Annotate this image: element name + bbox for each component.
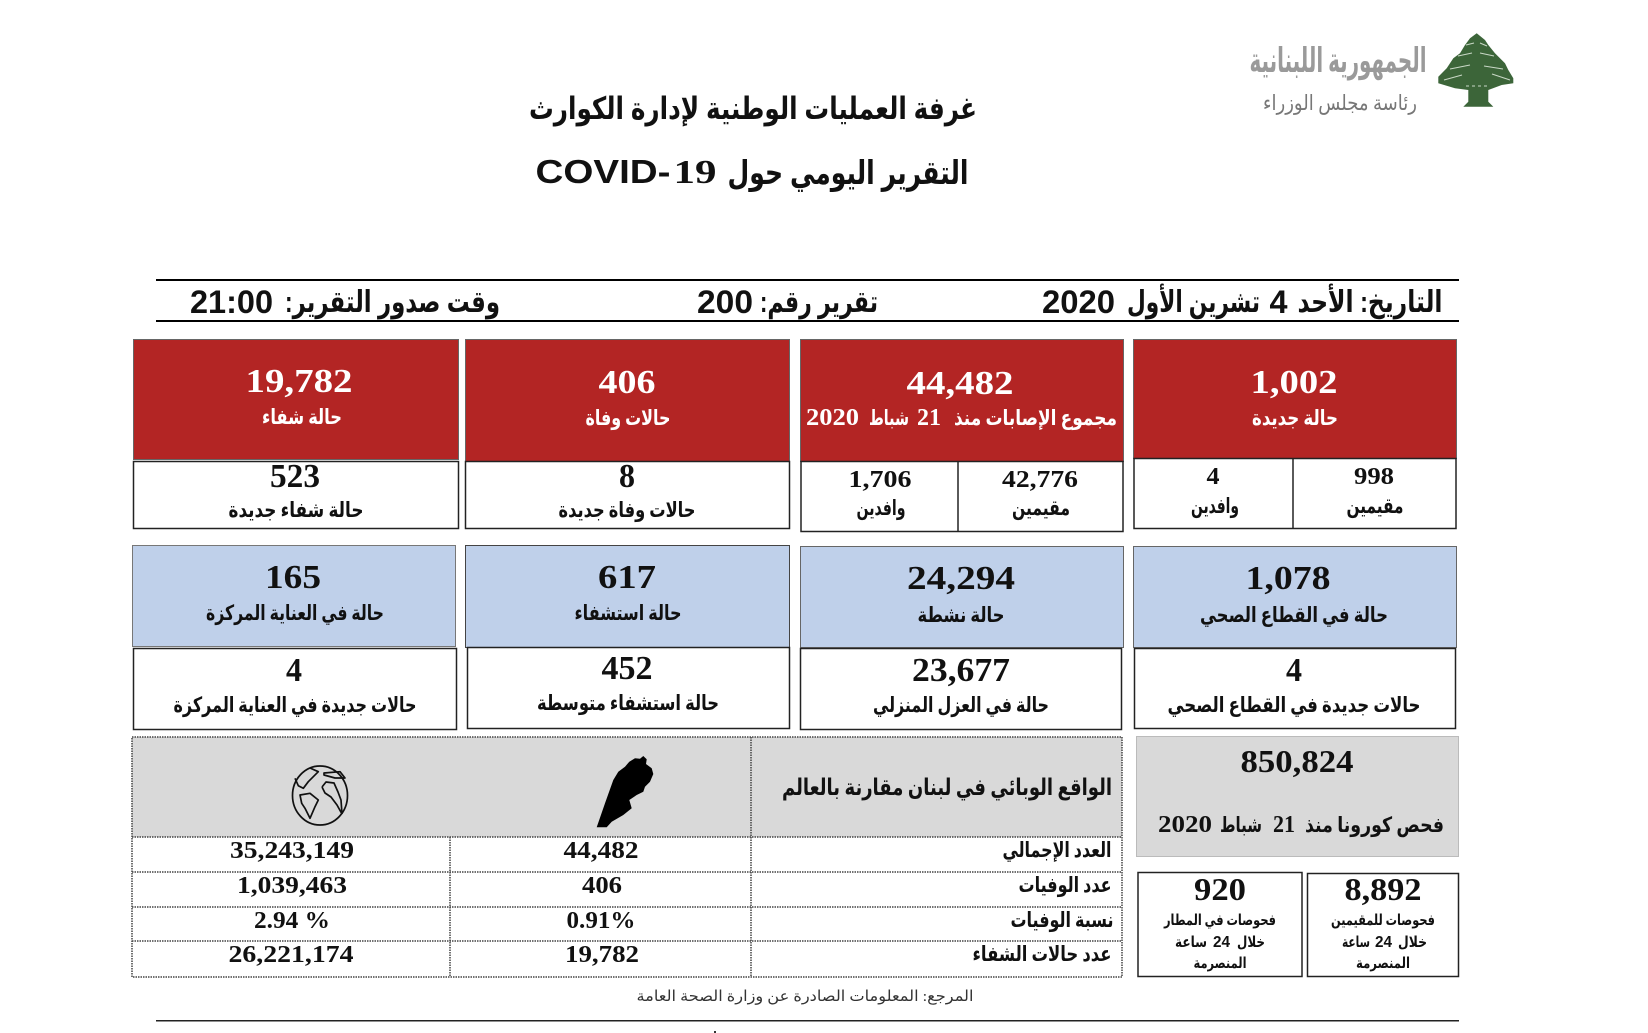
Lebanon value: 19,782 bbox=[565, 942, 639, 968]
Lebanon value: 0.91% bbox=[566, 908, 636, 934]
resident tests label bbox=[1331, 913, 1435, 972]
airport tests label: 24 bbox=[1213, 934, 1230, 951]
panel: new cases bbox=[1134, 340, 1456, 528]
logo text: presidency of the council of ministers: رئاسة مجلس الوزراء bbox=[1263, 91, 1417, 115]
panel: airport tests bbox=[1138, 871, 1302, 976]
panel: health sector bbox=[1134, 546, 1456, 728]
world value: 26,221,174 bbox=[228, 942, 354, 968]
report number bbox=[697, 284, 878, 320]
row label: نسبة الوفيات bbox=[1010, 908, 1114, 932]
resident tests label: ساعة bbox=[1342, 935, 1370, 951]
airport tests label: ساعة bbox=[1175, 935, 1207, 951]
panel: deaths bbox=[466, 340, 790, 528]
resident tests label: 24 bbox=[1375, 934, 1392, 951]
total tests label: فحص كورونا منذ bbox=[1305, 813, 1444, 837]
panel: total tests bbox=[1136, 736, 1458, 856]
new ICU label: حالات جديدة في العناية المركزة bbox=[174, 693, 416, 717]
panel: active cases bbox=[800, 546, 1124, 730]
report number: 200 bbox=[697, 284, 753, 320]
ICU label: حالة في العناية المركزة bbox=[206, 601, 384, 625]
health sector value: 1,078 bbox=[1246, 560, 1330, 597]
home isolation value: 23,677 bbox=[912, 652, 1010, 689]
residents value: 42,776 bbox=[1002, 467, 1078, 493]
total cases label: 21 bbox=[917, 405, 941, 431]
resident tests label: فحوصات للمقيمين bbox=[1331, 913, 1435, 929]
heading line 1: غرفة العمليات الوطنية لإدارة الكوارث bbox=[529, 91, 977, 127]
home isolation label: حالة في العزل المنزلي bbox=[873, 693, 1049, 717]
airport tests value: 920 bbox=[1194, 871, 1246, 907]
new recoveries label: حالة شفاء جديدة bbox=[228, 498, 364, 522]
arrivals value: 1,706 bbox=[848, 467, 912, 493]
report info bar bbox=[156, 279, 1459, 322]
row label: عدد الوفيات bbox=[1018, 873, 1112, 897]
panel: intensive care bbox=[132, 546, 456, 730]
recoveries value: 19,782 bbox=[246, 363, 352, 400]
moderate hospitalised label: حالة استشفاء متوسطة bbox=[537, 691, 719, 715]
total tests label bbox=[1158, 812, 1444, 838]
total tests label: 2020 bbox=[1158, 812, 1212, 838]
row label: عدد حالات الشفاء bbox=[972, 942, 1112, 966]
hospitalised label: حالة استشفاء bbox=[574, 601, 682, 625]
logo text: republic name: الجمهورية اللبنانية bbox=[1250, 43, 1426, 81]
world value: 35,243,149 bbox=[230, 838, 354, 864]
Lebanon value: 406 bbox=[582, 873, 622, 899]
ICU value: 165 bbox=[265, 559, 321, 596]
total tests label: 21 bbox=[1273, 812, 1295, 838]
resident tests label: المنصرمة bbox=[1356, 956, 1410, 972]
deaths label: حالات وفاة bbox=[586, 406, 670, 430]
airport tests label: فحوصات في المطار bbox=[1163, 913, 1276, 929]
residents label: مقيمين bbox=[1012, 496, 1070, 520]
world value: 1,039,463 bbox=[237, 873, 347, 899]
new health sector label: حالات جديدة في القطاع الصحي bbox=[1168, 693, 1420, 717]
icon: globe bbox=[292, 766, 348, 825]
icon: cedar tree bbox=[1438, 33, 1513, 107]
recoveries label: حالة شفاء bbox=[262, 405, 342, 429]
report date: 2020 bbox=[1042, 284, 1115, 320]
new cases value: 1,002 bbox=[1250, 364, 1338, 401]
arrivals value: 4 bbox=[1206, 464, 1220, 490]
panel: resident tests bbox=[1308, 871, 1458, 976]
active value: 24,294 bbox=[907, 560, 1015, 597]
report time: وقت صدور التقرير: bbox=[285, 286, 500, 320]
airport tests label: خلال bbox=[1237, 935, 1265, 951]
new recoveries value: 523 bbox=[270, 458, 320, 495]
report time: 21:00 bbox=[190, 284, 273, 320]
logo: Lebanese cedar and republic name bbox=[1250, 33, 1513, 115]
moderate hospitalised value: 452 bbox=[602, 650, 652, 687]
row: fatality rate bbox=[254, 908, 1114, 934]
report date bbox=[1042, 283, 1442, 320]
total cases label: مجموع الإصابات منذ bbox=[954, 406, 1117, 430]
airport tests label bbox=[1163, 913, 1276, 972]
row label: العدد الإجمالي bbox=[1002, 838, 1112, 862]
row: total count bbox=[230, 838, 1112, 864]
resident tests value: 8,892 bbox=[1344, 871, 1422, 907]
report date: 4 bbox=[1270, 284, 1288, 320]
airport tests label: المنصرمة bbox=[1194, 956, 1246, 972]
row: recoveries bbox=[228, 942, 1112, 968]
Lebanon value: 44,482 bbox=[564, 838, 638, 864]
report number: تقرير رقم: bbox=[760, 286, 878, 320]
report time bbox=[190, 284, 500, 320]
comparison table: Lebanon vs world bbox=[132, 737, 1122, 977]
residents value: 998 bbox=[1354, 464, 1394, 490]
heading line 2: COVID- bbox=[536, 153, 670, 190]
new deaths value: 8 bbox=[619, 458, 635, 495]
total cases label bbox=[806, 405, 1117, 431]
report date: تشرين الأول bbox=[1127, 283, 1260, 320]
resident tests label: خلال bbox=[1398, 935, 1427, 951]
heading line 2: 19 bbox=[674, 154, 716, 191]
arrivals label: وافدين bbox=[856, 496, 906, 520]
total cases label: 2020 bbox=[806, 405, 859, 431]
total cases label: شباط bbox=[869, 406, 909, 430]
heading line 2 bbox=[536, 153, 968, 193]
total tests value: 850,824 bbox=[1240, 743, 1354, 779]
active label: حالة نشطة bbox=[918, 603, 1004, 627]
health sector label: حالة في القطاع الصحي bbox=[1200, 603, 1388, 627]
row: deaths bbox=[237, 873, 1112, 899]
report date: التاريخ: الأحد bbox=[1298, 283, 1442, 319]
panel: hospitalised bbox=[466, 546, 790, 728]
source note: المرجع: المعلومات الصادرة عن وزارة الصحة العامة bbox=[636, 989, 974, 1005]
hospitalised value: 617 bbox=[598, 559, 656, 596]
panel: total cases bbox=[800, 340, 1124, 532]
new ICU value: 4 bbox=[286, 652, 302, 689]
world value: 2.94 % bbox=[254, 908, 330, 934]
total cases value: 44,482 bbox=[906, 365, 1014, 402]
table heading: الواقع الوبائي في لبنان مقارنة بالعالم bbox=[782, 775, 1112, 801]
icon: map of Lebanon bbox=[597, 756, 653, 827]
new health sector value: 4 bbox=[1286, 652, 1302, 689]
title bbox=[529, 91, 977, 193]
heading line 2: التقرير اليومي حول bbox=[728, 154, 968, 193]
new deaths label: حالات وفاة جديدة bbox=[558, 498, 696, 522]
arrivals label: وافدين bbox=[1191, 494, 1239, 518]
deaths value: 406 bbox=[598, 364, 656, 401]
total tests label: شباط bbox=[1220, 813, 1262, 837]
residents label: مقيمين bbox=[1346, 494, 1404, 518]
new cases label: حالة جديدة bbox=[1252, 406, 1338, 430]
panel: recoveries bbox=[134, 340, 458, 528]
